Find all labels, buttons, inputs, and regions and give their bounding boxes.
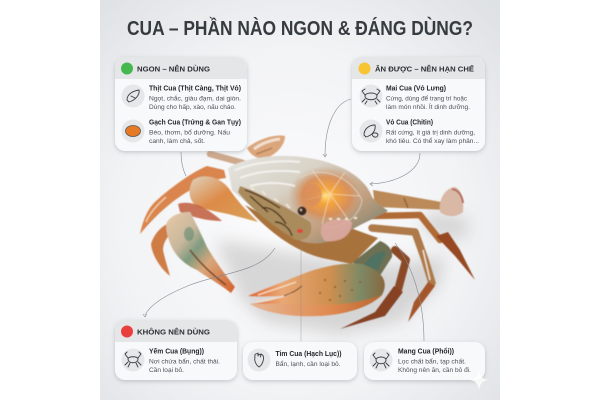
arrow: vo cua pointer [370,153,420,186]
panel: ngon nen dung [115,57,247,151]
text: mang cua: Lọc chất bẩn, tạp chất. [398,356,466,366]
text: mang cua: Mang Cua (Phổi)) [398,348,454,356]
text: tim cua [276,351,342,368]
text: mang cua: Không nên ăn, cần bỏ đi. [398,365,471,374]
text: gach cua [149,120,241,145]
header: an duoc: ĂN ĐƯỢC – NÊN HẠN CHẾ [375,64,474,74]
text: mai cua: Cứng, dùng để trang trí hoặc [386,94,468,102]
text: tim cua: Bẩn, lạnh, cần loại bỏ. [276,359,341,368]
text: thit cua: Thịt Cua (Thịt Càng, Thịt Vỏ) [149,86,241,92]
header: khong nen dung: KHÔNG NÊN DÙNG [137,328,210,336]
icon: crab shell [360,84,382,108]
icon: shell fragment [360,120,382,142]
panel: tim cua [243,342,357,380]
pink gland [321,219,352,241]
text: yem cua: Yếm Cua (Bụng)) [149,348,204,356]
carapace [228,156,388,243]
arrow: tim cua pointer [300,240,302,341]
text: gach cua: Béo, thơm, bổ dưỡng. Nấu [149,128,230,136]
text: vo cua [386,120,479,145]
arrow: yem cua pointer [143,248,275,317]
icon: crab meat [122,84,144,108]
text: mai cua [386,86,470,111]
icon: crab roe [122,120,144,142]
text: mai cua: làm món nhồi. Ít dinh dưỡng. [386,102,470,111]
text: mang cua [398,348,471,374]
left arm [189,176,258,222]
bead row [329,218,357,219]
big claw arm [353,241,392,288]
panel: mang cua [364,342,485,380]
header: ngon: NGON – NÊN DÙNG [137,64,210,74]
panel: khong nen dung [115,320,237,380]
text: thit cua: Ngọt, chắc, giàu đạm, dai giòn. [149,94,241,102]
carapace internal glow [288,166,364,228]
arrow: thit cua pointer [181,152,186,176]
face [238,186,311,240]
back left paddle leg [210,136,285,163]
text: yem cua [149,348,220,374]
icon: sparkle [470,370,488,390]
left claw [166,212,235,293]
arrow: mai cua pointer [323,99,351,157]
text: vo cua: Vỏ Cua (Chitin) [386,120,433,126]
left legs [140,166,226,276]
underbody [245,205,378,264]
text: vo cua: khó tiêu. Có thể xay làm phân... [386,137,479,145]
right legs [340,187,475,329]
icon: crab gills [370,348,392,372]
icon: crab apron [122,348,144,372]
icon: heart [248,348,270,372]
background panel [100,0,500,400]
text: yem cua: Cần loại bỏ. [149,365,184,374]
text: tim cua: Tim Cua (Hạch Lục)) [276,351,342,358]
shell highlights [235,161,300,186]
text: vo cua: Rất cứng, ít giá trị dinh dưỡng, [386,128,475,136]
text: gach cua: Gạch Cua (Trứng & Gan Tụy) [149,120,241,126]
text: thit cua: Dùng cho hấp, xào, nấu cháo. [149,102,236,111]
crab illustration [140,136,475,335]
big right claw [248,263,385,316]
text: yem cua: Nơi chứa bẩn, chất thải. [149,356,220,366]
crab shadow [215,212,470,335]
title: CUA – PHẦN NÀO NGON & ĐÁNG DÙNG? [127,16,473,40]
panel: an duoc nen han che [352,57,485,151]
text: gach cua: canh, làm chả, sốt. [149,136,205,145]
text: mai cua: Mai Cua (Vỏ Lưng) [386,86,446,92]
arrow: mang cua pointer [395,243,424,341]
text: thit cua [149,86,241,111]
